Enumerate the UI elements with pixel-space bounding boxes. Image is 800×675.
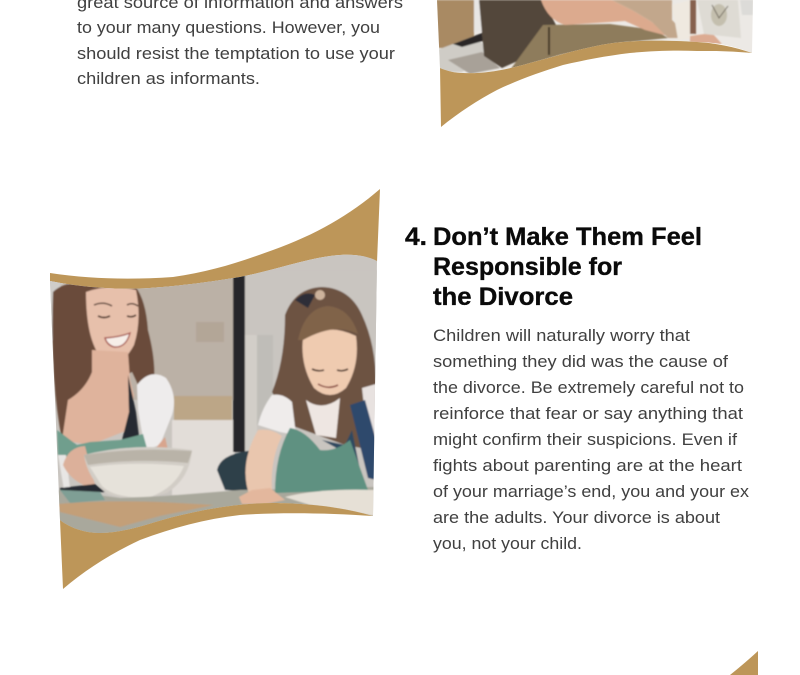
text block: section 4 body: of your marriage’s end, you and your ex: [433, 482, 750, 501]
text block: section 4 body: Children will naturally worry that: [433, 326, 690, 345]
text block: section 4 body: you, not your child.: [433, 534, 582, 553]
mother skin: [86, 287, 139, 363]
girl arm and hand: [246, 430, 282, 497]
heading: section 4: the Divorce: [433, 283, 573, 311]
tan swoosh: next section tip: [730, 651, 758, 675]
text block: section 4 body: fights about parenting are at the heart: [433, 456, 742, 475]
tan swoosh: [440, 41, 752, 127]
heading: section 4: Don’t Make Them Feel: [433, 223, 702, 251]
girl face: [302, 329, 357, 395]
girl hair: [272, 287, 376, 450]
text block: section 4 body: something they did was the cause of: [433, 352, 728, 371]
mother clothes: [137, 374, 174, 450]
text block: section 4 body: are the adults. Your divorce is about: [433, 508, 720, 527]
text block: end of section 3: [77, 0, 403, 88]
text block: section 4 body: the divorce. Be extremely careful not to: [433, 378, 744, 397]
girl clothes: [258, 395, 296, 435]
mother hair: [52, 283, 154, 440]
text block: section 4 body: [433, 326, 750, 553]
text block: end of section 3: should resist the temptation to use your: [77, 44, 395, 63]
panel: section 4 photo with tan swooshes: [50, 189, 380, 589]
background: [50, 280, 60, 340]
bowl: [84, 447, 192, 498]
text block: end of section 3: children as informants.: [77, 69, 260, 88]
text block: section 4 body: might confirm their suspicions. Even if: [433, 430, 737, 449]
photo: mother and daughter baking: [50, 250, 380, 540]
tan swoosh: bottom: [60, 503, 373, 589]
text block: section 4 body: reinforce that fear or say anything that: [433, 404, 743, 423]
table: [58, 487, 375, 535]
heading: section 4: Responsible for: [433, 253, 622, 281]
text block: end of section 3: to your many questions. However, you: [77, 18, 380, 37]
mother face features: [94, 303, 112, 306]
photo: parent and child sitting on floor: [436, 0, 753, 80]
heading: section 4: 4.: [405, 223, 427, 251]
heading: section 4: [405, 223, 702, 311]
panel: section 3 photo with tan swoosh: [436, 0, 753, 127]
tan swoosh: top: [50, 189, 380, 289]
